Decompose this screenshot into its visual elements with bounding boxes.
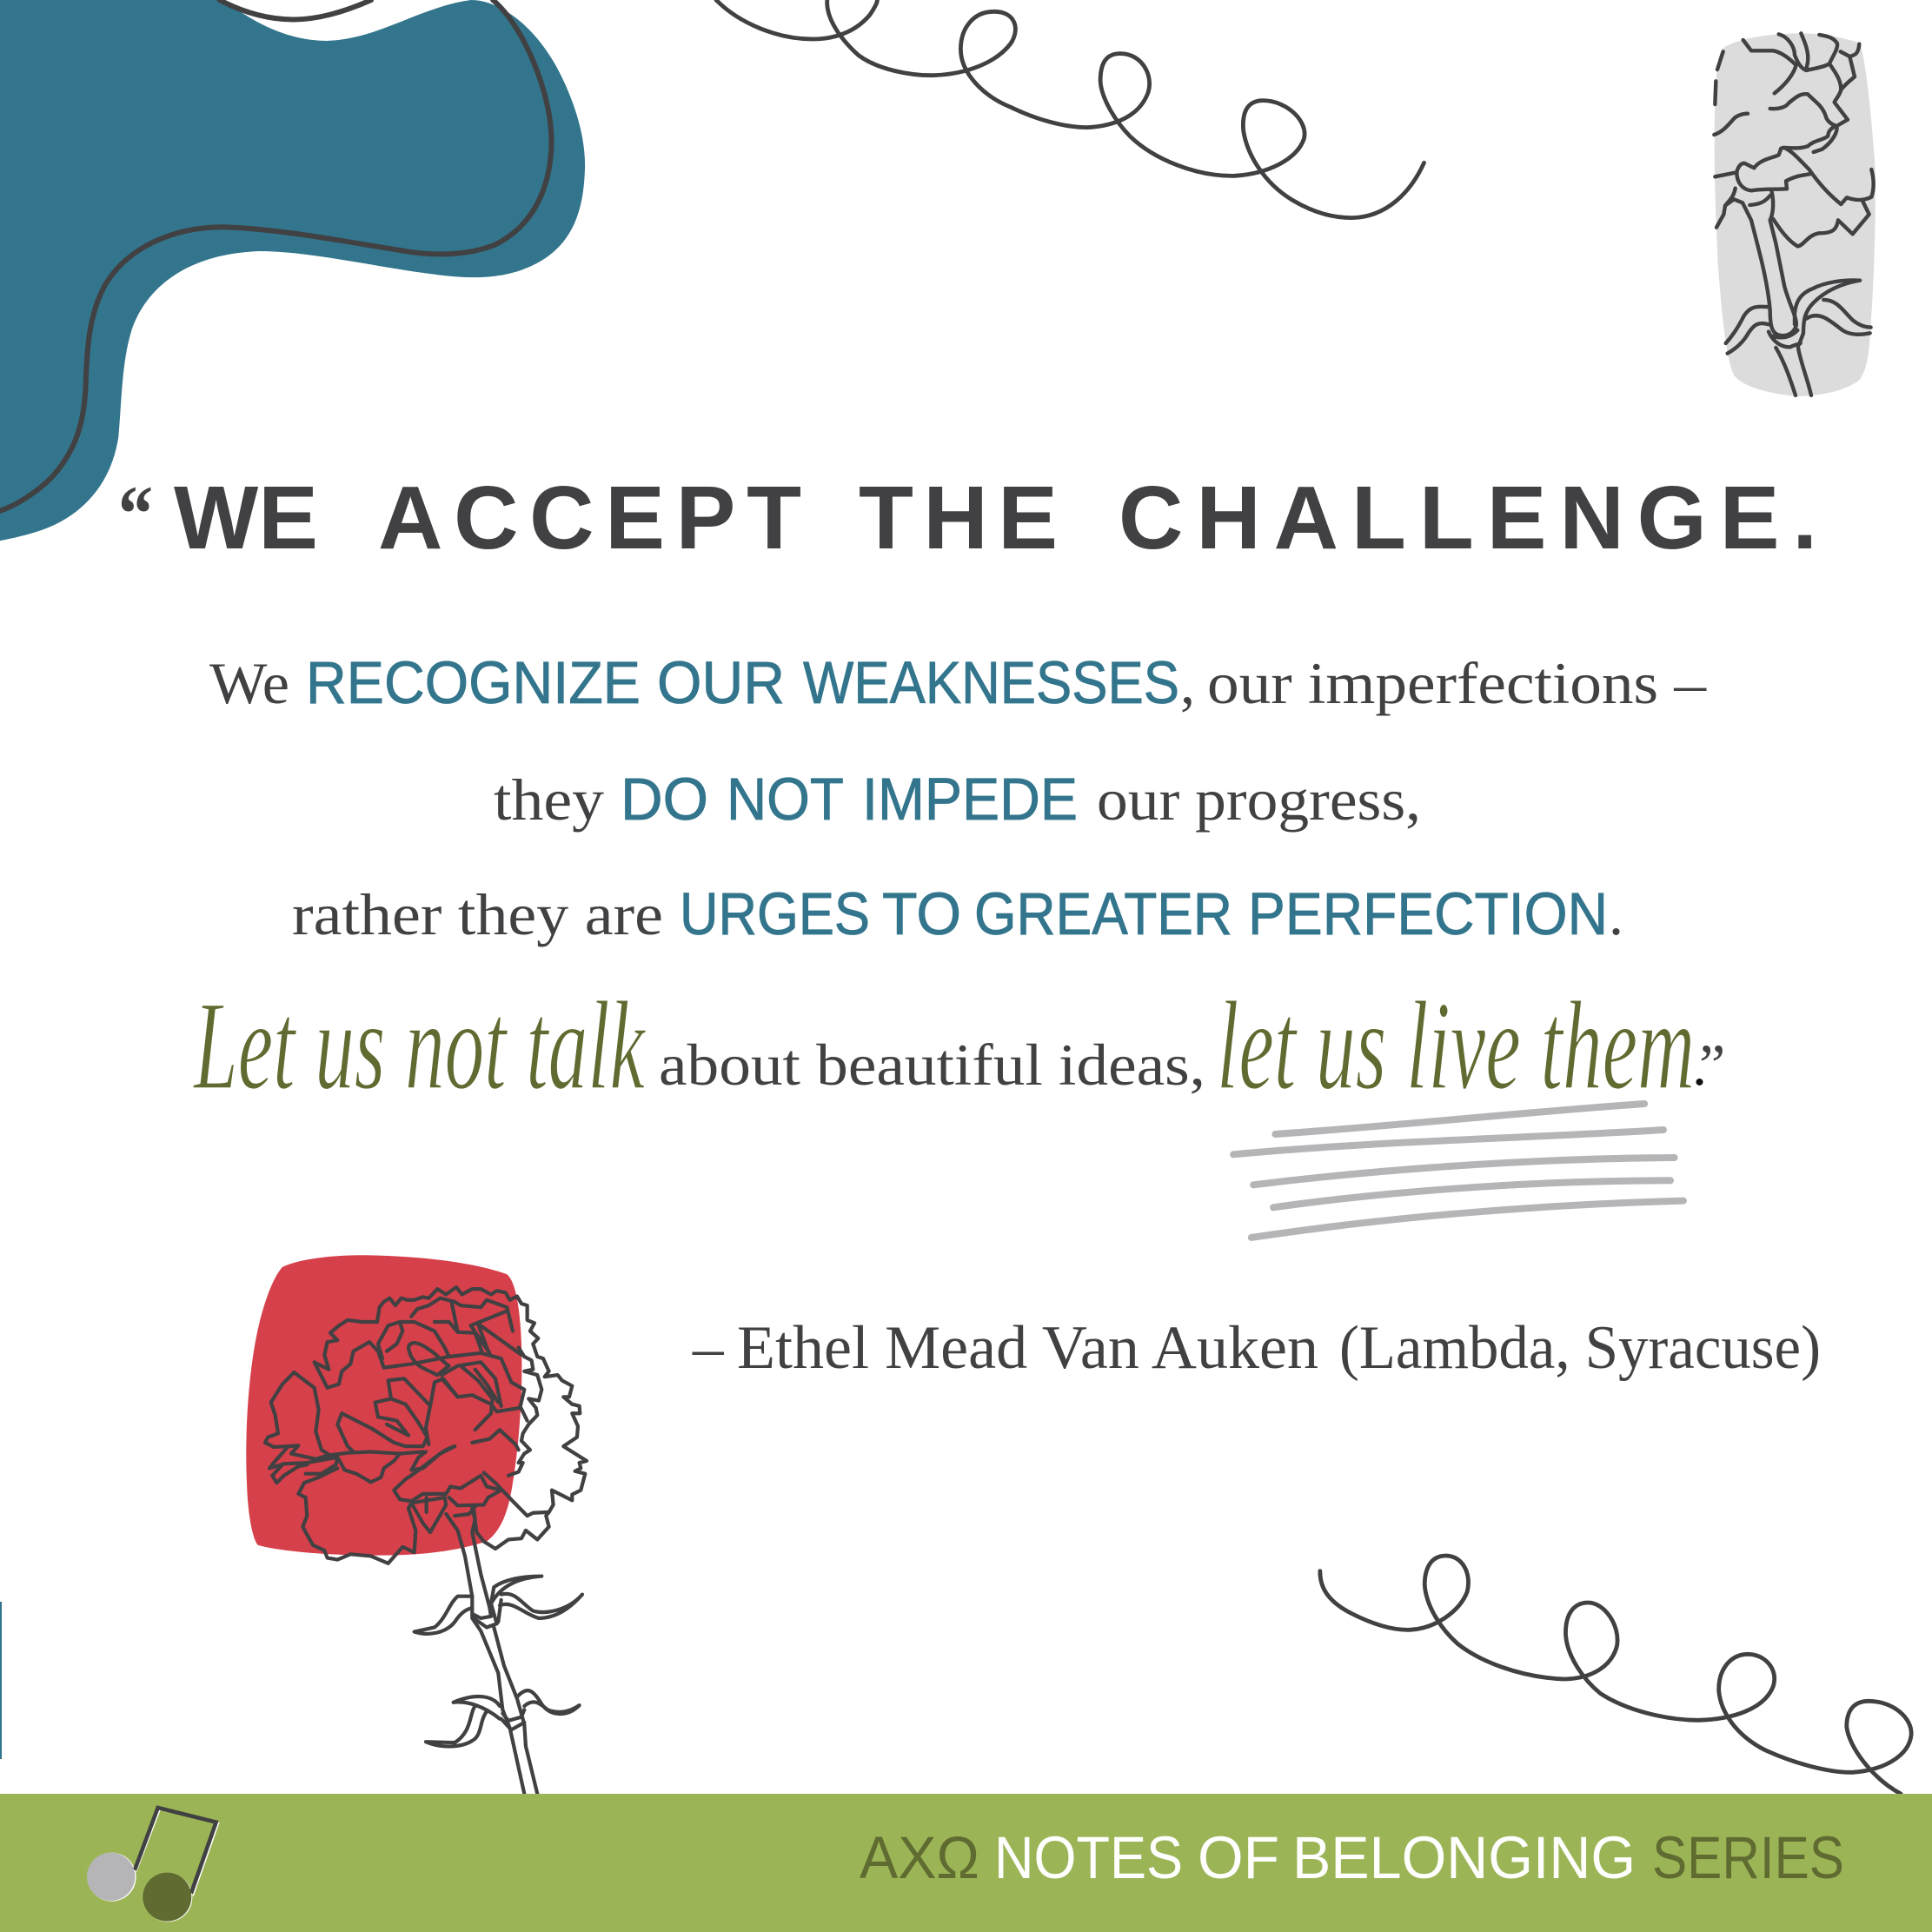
quote line 3: URGES	[680, 880, 870, 947]
left edge teal sliver	[0, 1602, 2, 1759]
heading: WE	[174, 468, 318, 568]
series label: NOTES	[994, 1824, 1183, 1891]
series label: AXΩ	[860, 1824, 979, 1891]
quote line 1: RECOGNIZE	[306, 649, 641, 716]
series label: SERIES	[1652, 1824, 1844, 1891]
quote line 4 with script accents: .	[1692, 1032, 1707, 1098]
quote line 3: GREATER	[974, 880, 1232, 947]
icon: music note	[87, 1808, 219, 1922]
icon: carnation detail on grey panel, top right	[1714, 33, 1876, 396]
heading: “	[118, 469, 153, 558]
attribution	[692, 1314, 1821, 1382]
icon: red panel with carnation line drawing	[246, 1255, 587, 1794]
series label: OF	[1198, 1824, 1279, 1891]
quote line 2: IMPEDE	[862, 766, 1078, 833]
heading	[118, 468, 1817, 568]
quote line 1	[209, 649, 1707, 716]
curly line, bottom right	[1320, 1556, 1911, 1794]
grey scribble underline	[1233, 1104, 1683, 1238]
quote line 3: TO	[882, 880, 961, 947]
quote line 2: DO	[621, 766, 708, 833]
quote line 2: NOT	[727, 766, 844, 833]
series label	[860, 1824, 1844, 1891]
attribution: Ethel Mead Van Auken	[737, 1314, 1318, 1382]
heading: CHALLENGE.	[1119, 468, 1817, 568]
quote line 4 with script accents: about beautiful ideas,	[659, 1032, 1205, 1098]
curly line, top	[716, 0, 1424, 218]
quote line 4 with script accents: ”	[1699, 1032, 1725, 1098]
quote line 3: .	[1609, 881, 1623, 947]
quote line 4 with script accents	[193, 975, 1725, 1116]
quote line 3: rather they are	[292, 881, 663, 947]
quote line 3	[292, 880, 1623, 947]
quote line 2	[494, 766, 1421, 833]
footer banner	[0, 1794, 1932, 1932]
quote line 1: our imperfections –	[1207, 650, 1707, 716]
heading: ACCEPT	[378, 468, 801, 568]
quote line 1: We	[209, 650, 289, 716]
attribution: –	[692, 1314, 724, 1382]
heading: THE	[859, 468, 1058, 568]
series label: BELONGING	[1292, 1824, 1636, 1891]
quote line 1: OUR	[657, 649, 785, 716]
quote line 4 with script accents: Let us not talk	[193, 975, 646, 1116]
quote line 2: our progress,	[1097, 767, 1421, 833]
quote line 1: WEAKNESSES	[803, 649, 1179, 716]
quote line 3: PERFECTION	[1248, 880, 1608, 947]
attribution: (Lambda, Syracuse)	[1339, 1314, 1821, 1382]
quote line 2: they	[494, 767, 604, 833]
teal blob with outline, top left	[0, 0, 585, 541]
quote line 1: ,	[1180, 650, 1195, 716]
